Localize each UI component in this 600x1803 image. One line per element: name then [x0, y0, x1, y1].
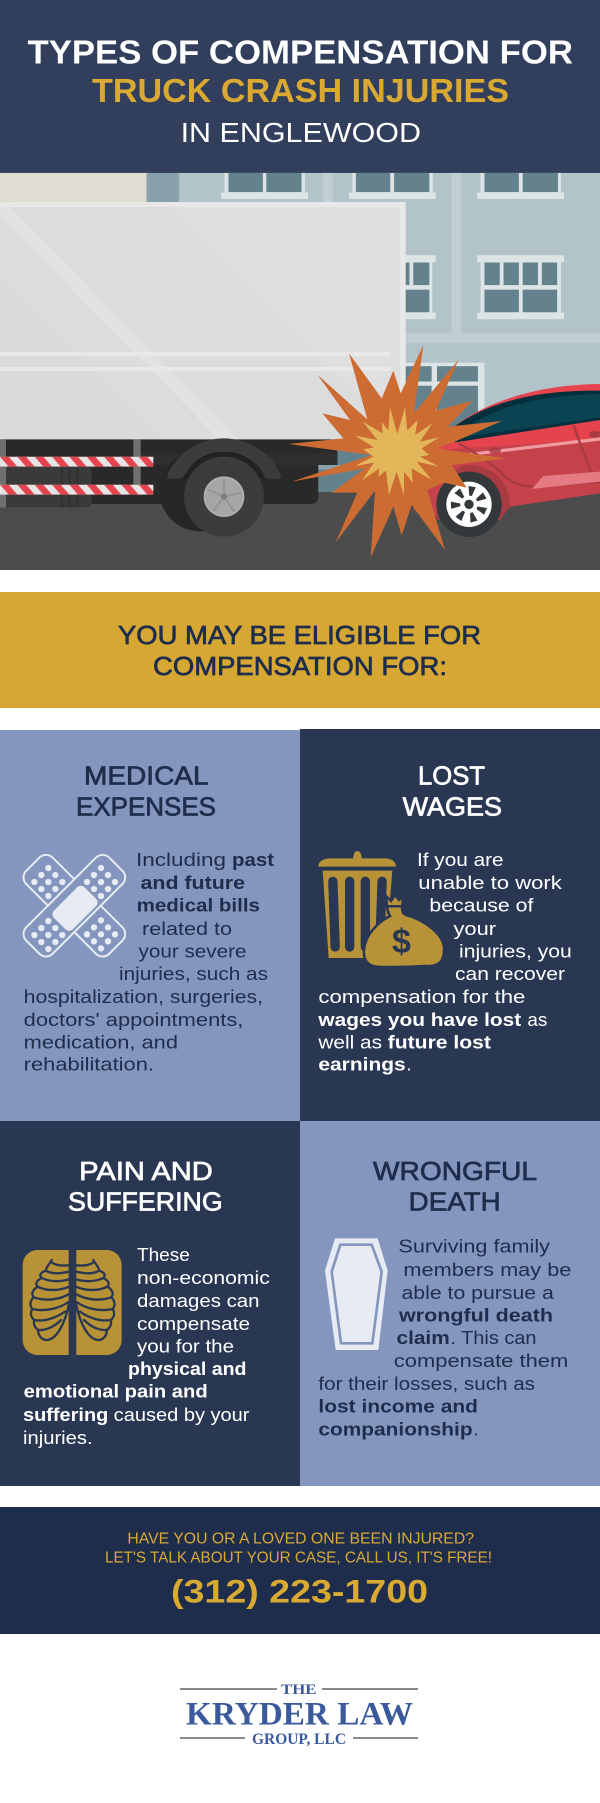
text: wrongful death description: .: [473, 1419, 479, 1440]
text: medical expenses description: past: [232, 849, 274, 870]
text: pain and suffering description: injuries.: [23, 1427, 93, 1448]
text: wrongful death description: . This can: [450, 1327, 536, 1348]
heading: lost wages: [403, 762, 502, 822]
text: medical expenses description: and future: [140, 872, 245, 893]
text: wrongful death description: companionship: [318, 1419, 473, 1440]
heading: pain and suffering: SUFFERING: [68, 1189, 223, 1217]
text: medical expenses description: medical bills: [137, 895, 260, 916]
text: wrongful death description: wrongful death: [398, 1305, 553, 1326]
eligibility banner: [0, 592, 600, 708]
text: lost wages description: future lost: [388, 1032, 491, 1053]
heading: lost wages: LOST: [418, 762, 485, 790]
text: pain and suffering description: damages can: [137, 1290, 260, 1311]
text: pain and suffering description: [23, 1244, 270, 1448]
text: medical expenses description: [24, 849, 274, 1075]
heading: medical expenses: EXPENSES: [76, 794, 216, 822]
icon: rib cage: [23, 1250, 122, 1355]
text: wrongful death description: lost income and: [318, 1396, 478, 1417]
icon: coffin: [325, 1238, 388, 1350]
text: pain and suffering description: caused by your: [114, 1404, 250, 1425]
icon: trash can and money bag: [318, 851, 444, 967]
text: lost wages description: .: [406, 1054, 412, 1075]
title banner: [0, 0, 600, 173]
text: medical expenses description: your severe: [138, 940, 246, 961]
icon: bandages: [20, 851, 129, 960]
text: medical expenses description: related to: [142, 918, 232, 939]
call to action banner: LET'S TALK ABOUT YOUR CASE, CALL US, IT'S FREE!: [105, 1549, 492, 1566]
call to action banner: HAVE YOU OR A LOVED ONE BEEN INJURED?: [127, 1530, 474, 1547]
heading: wrongful death: DEATH: [409, 1189, 501, 1217]
text: lost wages description: because of: [429, 895, 534, 916]
text: lost wages description: as: [527, 1009, 547, 1030]
heading: lost wages: WAGES: [403, 794, 502, 822]
eligibility banner: COMPENSATION FOR:: [153, 651, 447, 681]
text: lost wages description: your: [454, 918, 496, 939]
text: lost wages description: compensation for the: [318, 986, 525, 1007]
text: medical expenses description: Including: [136, 849, 226, 870]
heading: pain and suffering: PAIN AND: [79, 1158, 213, 1186]
heading: wrongful death: WRONGFUL: [373, 1158, 537, 1186]
illustration: truck crashing into car: [0, 173, 600, 570]
heading: medical expenses: [76, 762, 216, 822]
text: pain and suffering description: compensate: [137, 1313, 250, 1334]
logo: The Kryder Law Group, LLC: THE: [281, 1682, 316, 1698]
road: [0, 492, 600, 570]
logo: The Kryder Law Group, LLC: [180, 1682, 418, 1748]
red car: [413, 384, 600, 537]
text: lost wages description: can recover: [455, 963, 565, 984]
title banner: IN ENGLEWOOD: [181, 117, 421, 148]
text: pain and suffering description: you for the: [137, 1335, 234, 1356]
text: medical expenses description: medication, and: [24, 1032, 178, 1053]
truck undercarriage and wheel: [0, 438, 337, 537]
eligibility banner: YOU MAY BE ELIGIBLE FOR: [118, 620, 481, 650]
truck cargo box: [0, 202, 406, 440]
heading: pain and suffering: [68, 1158, 223, 1217]
call to action banner: [0, 1507, 600, 1634]
heading: wrongful death: [373, 1158, 537, 1217]
text: wrongful death description: [318, 1236, 571, 1440]
text: pain and suffering description: emotional pain and: [24, 1381, 208, 1402]
text: lost wages description: wages you have lost: [317, 1009, 521, 1030]
icon: trash can and money bag: $: [392, 923, 411, 961]
text: pain and suffering description: non-economic: [137, 1267, 270, 1288]
building background: [0, 173, 600, 497]
text: lost wages description: [317, 849, 572, 1075]
text: pain and suffering description: suffering: [23, 1404, 108, 1425]
text: wrongful death description: claim: [396, 1327, 450, 1348]
text: pain and suffering description: These: [137, 1244, 190, 1265]
panel: lost wages: [300, 729, 600, 1121]
text: pain and suffering description: physical and: [128, 1358, 246, 1379]
text: wrongful death description: members may be: [403, 1259, 571, 1280]
text: lost wages description: unable to work: [418, 872, 563, 893]
text: lost wages description: injuries, you: [459, 940, 572, 961]
text: wrongful death description: able to pursue a: [402, 1282, 555, 1303]
text: wrongful death description: compensate them: [394, 1350, 568, 1371]
logo: The Kryder Law Group, LLC: KRYDER LAW: [186, 1697, 413, 1733]
collision starburst: [288, 345, 506, 557]
text: lost wages description: earnings: [318, 1054, 406, 1075]
logo: The Kryder Law Group, LLC: GROUP, LLC: [252, 1731, 346, 1748]
text: lost wages description: If you are: [417, 849, 504, 870]
text: lost wages description: well as: [317, 1032, 382, 1053]
text: medical expenses description: hospitalization, surgeries,: [24, 986, 263, 1007]
panel: medical expenses: [0, 730, 300, 1121]
panel: wrongful death: [300, 1121, 600, 1486]
text: medical expenses description: doctors' appointments,: [24, 1009, 243, 1030]
heading: medical expenses: MEDICAL: [84, 762, 209, 790]
text: medical expenses description: rehabilitation.: [24, 1054, 154, 1075]
text: wrongful death description: for their losses, such as: [318, 1373, 535, 1394]
title banner: TYPES OF COMPENSATION FOR: [28, 34, 573, 70]
phone number: (312) 223-1700: [171, 1574, 428, 1610]
text: medical expenses description: injuries, such as: [119, 963, 268, 984]
title banner: TRUCK CRASH INJURIES: [92, 72, 509, 109]
panel: pain and suffering: [0, 1121, 300, 1486]
text: wrongful death description: Surviving family: [398, 1236, 551, 1257]
